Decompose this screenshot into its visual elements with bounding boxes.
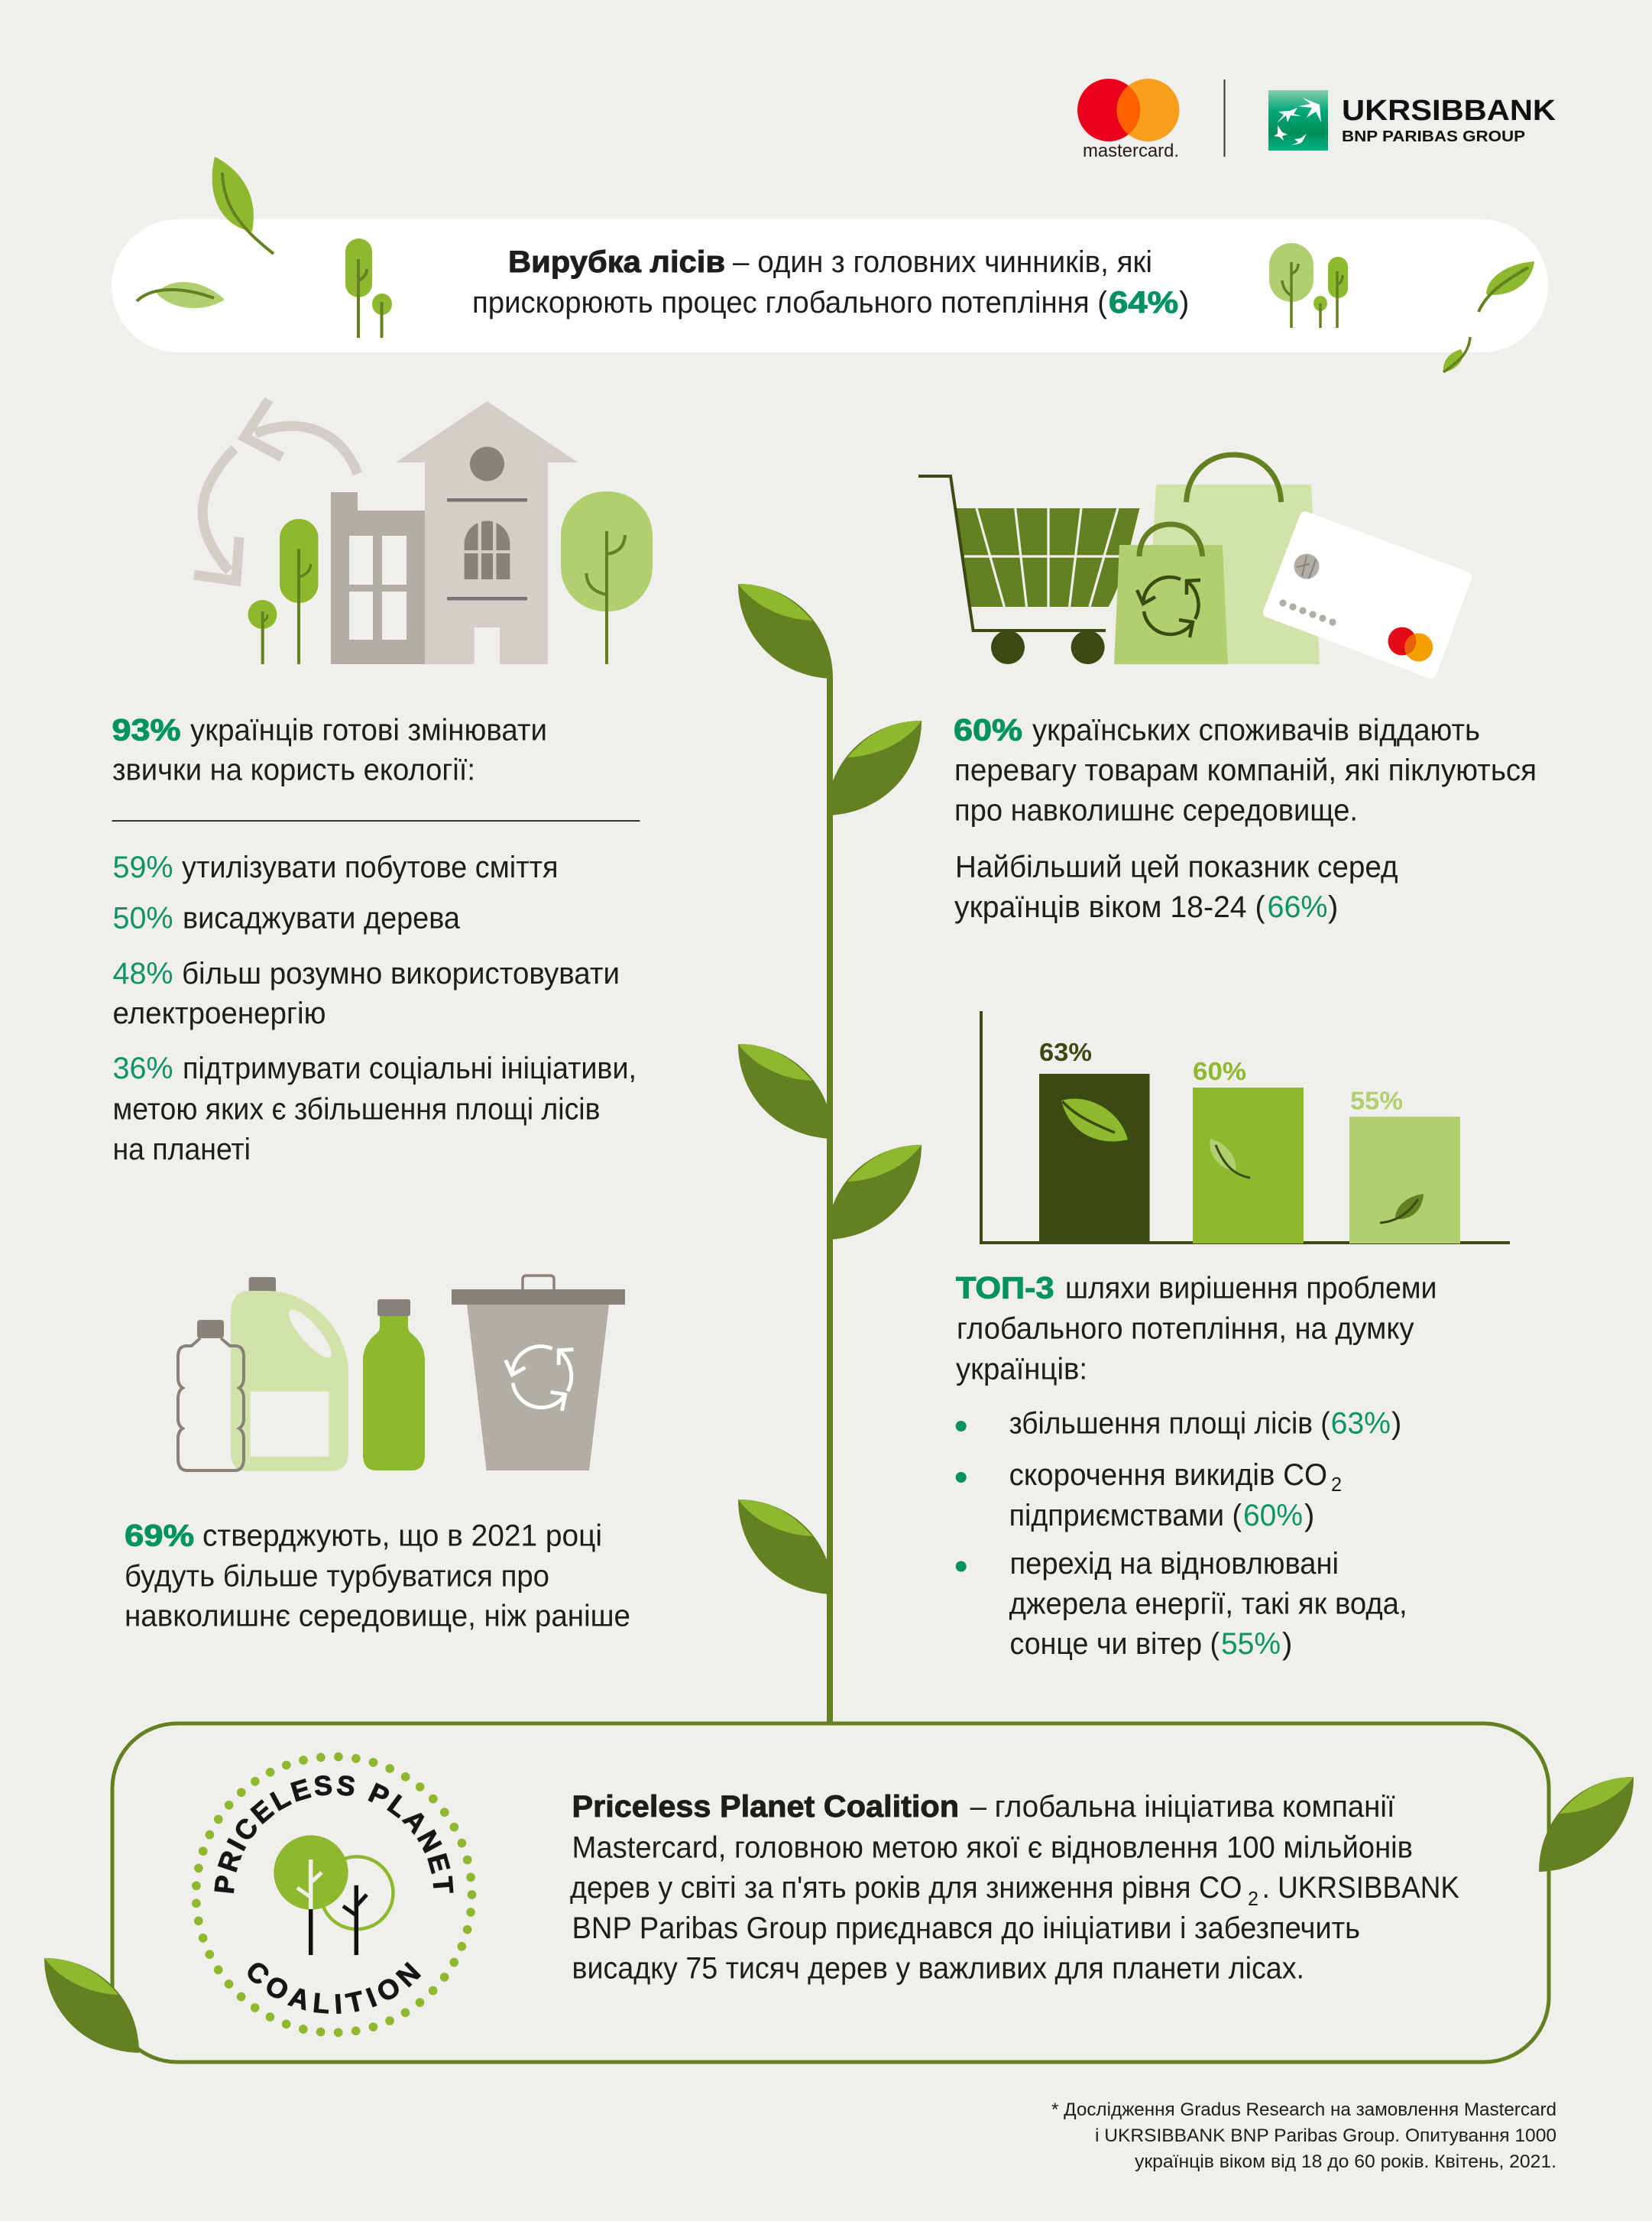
icon: trees left of headline — [345, 238, 392, 338]
list: top 3 solutions: збільшення площі лісів ( — [1009, 1406, 1330, 1440]
text block: 69%: стверджують, що в 2021 році — [202, 1519, 602, 1553]
badge: Priceless Planet Coalition: PRICELESS PLANET — [214, 1775, 454, 1894]
text block: 69% — [125, 1519, 630, 1633]
vine leaf 2 — [827, 721, 922, 815]
text block: 60% consumers: 60% — [954, 714, 1022, 747]
bar: 55% — [1349, 1087, 1460, 1243]
vine leaf 5 — [738, 1500, 833, 1594]
text block: top 3: глобального потепління, на думку — [957, 1312, 1414, 1345]
text block: 93% habits: українців готові змінювати — [190, 714, 547, 747]
illustration: shopping cart, bags and card — [918, 455, 1466, 673]
text block: 60% consumers: українців віком 18-24 ( — [954, 890, 1265, 924]
vine leaf 4 — [827, 1145, 922, 1240]
headline text: ) — [1179, 286, 1189, 319]
payment card — [1268, 517, 1466, 673]
list: habit changes: утилізувати побутове сміття — [182, 851, 558, 884]
clear bottle — [178, 1320, 244, 1470]
text block: 93% habits: 93% — [112, 714, 180, 747]
logo: ukrsibbank — [1268, 90, 1556, 151]
list: habit changes: на планеті — [113, 1133, 251, 1166]
footnote: і UKRSIBBANK BNP Paribas Group. Опитування 1000 — [1095, 2125, 1556, 2146]
headline text — [472, 245, 1189, 319]
cycle arrows — [194, 400, 358, 581]
logo: ukrsibbank: BNP PARIBAS GROUP — [1342, 128, 1525, 145]
leaf: top left — [212, 157, 274, 254]
logo: mastercard — [1077, 79, 1180, 161]
headline text: 64% — [1109, 286, 1178, 319]
text block: top 3 — [956, 1272, 1437, 1386]
list: top 3 solutions: ) — [1282, 1627, 1292, 1661]
headline pill — [112, 219, 1548, 352]
list: habit changes — [113, 851, 637, 1166]
panel: Priceless Planet Coalition — [110, 1721, 1551, 2064]
logo: mastercard: mastercard. — [1083, 141, 1179, 161]
list: habit changes: 36% — [113, 1052, 173, 1085]
vine leaf 1 — [738, 584, 833, 679]
headline text: Вирубка лісів — [508, 245, 725, 279]
illustration: house, trees and cycle arrows — [194, 400, 653, 664]
text block: 69%: 69% — [125, 1519, 194, 1553]
text block: 60% consumers: Найбільший цей показник серед — [955, 850, 1398, 884]
leaf: small right — [1443, 337, 1470, 372]
text block: top 3: ТОП-3 — [956, 1272, 1054, 1305]
vine: stem and leaves — [738, 584, 922, 1723]
list: top 3 solutions: ) — [1391, 1406, 1401, 1440]
list: top 3 solutions: ) — [1304, 1499, 1314, 1532]
bar: 55%: 55% — [1350, 1087, 1403, 1114]
leaf: inside pill left — [137, 282, 225, 308]
list: top 3 solutions: 60% — [1243, 1499, 1303, 1532]
text block: 60% consumers: перевагу товарам компаній, які піклуються — [954, 754, 1537, 787]
recycling bin — [452, 1276, 625, 1470]
bar: 60% — [1193, 1057, 1304, 1243]
panel text: висадку 75 тисяч дерев у важливих для планети лісах. — [572, 1952, 1304, 1986]
text block: 69%: будуть більше турбуватися про — [125, 1559, 549, 1593]
text block: 93% habits: звички на користь екології: — [112, 754, 475, 787]
list: top 3 solutions: перехід на відновлювані — [1010, 1547, 1339, 1581]
text block: 60% consumers: ) — [1328, 890, 1338, 924]
list: habit changes: метою яких є збільшення площі лісів — [113, 1093, 601, 1127]
list: top 3 solutions: 63% — [1331, 1406, 1391, 1440]
text block: 93% habits — [112, 714, 547, 787]
text block: 60% consumers: 66% — [1267, 890, 1328, 924]
footnote: українців віком від 18 до 60 років. Квітень, 2021. — [1135, 2151, 1556, 2172]
small bag with recycle symbol — [1114, 524, 1228, 664]
panel text: 2 — [1248, 1887, 1258, 1910]
text block: top 3: шляхи вирішення проблеми — [1065, 1272, 1437, 1305]
list: habit changes: 48% — [113, 957, 173, 991]
text block: top 3: українців: — [956, 1353, 1087, 1386]
text block: 60% consumers — [954, 714, 1537, 924]
trees near house — [248, 491, 653, 664]
list: top 3 solutions: підприємствами ( — [1009, 1499, 1242, 1532]
list: top 3 solutions: скорочення викидів CO — [1009, 1458, 1327, 1492]
green bottle — [363, 1299, 425, 1470]
list: top 3 solutions: джерела енергії, такі як вода, — [1009, 1587, 1407, 1620]
headline text: прискорюють процес глобального потепління ( — [472, 286, 1108, 319]
list: habit changes: 50% — [113, 902, 173, 935]
bar: 63%: 63% — [1039, 1038, 1092, 1066]
bar: 63% — [1039, 1038, 1149, 1243]
icon: trees right of headline — [1269, 243, 1348, 328]
bar: 60%: 60% — [1193, 1057, 1246, 1085]
panel text — [570, 1790, 1459, 1986]
panel text: Mastercard, головною метою якої є відновлення 100 мільйонів — [572, 1831, 1413, 1865]
leaf: top right — [1479, 261, 1534, 312]
list: habit changes: висаджувати дерева — [183, 902, 461, 935]
list: top 3 solutions — [956, 1406, 1407, 1661]
large bag — [1146, 455, 1320, 664]
list: top 3 solutions: сонце чи вітер ( — [1010, 1627, 1220, 1661]
text block: 60% consumers: про навколишнє середовище. — [954, 793, 1358, 827]
shopping cart — [918, 476, 1139, 664]
badge: Priceless Planet Coalition — [192, 1752, 477, 2038]
panel text: дерев у світі за п'ять років для зниження рівня CO — [570, 1871, 1242, 1905]
list: habit changes: підтримувати соціальні ініціативи, — [183, 1052, 637, 1085]
footnote — [1051, 2099, 1556, 2172]
list: habit changes: 59% — [113, 851, 173, 884]
vine leaf 3 — [738, 1044, 833, 1139]
leaf: panel right — [1539, 1777, 1634, 1872]
list: habit changes: більш розумно використовувати — [182, 957, 620, 991]
headline text: – один з головних чинників, які — [733, 245, 1152, 279]
tower building — [396, 401, 578, 664]
list: top 3 solutions: 2 — [1331, 1473, 1342, 1496]
footnote: * Дослідження Gradus Research на замовлення Mastercard — [1051, 2099, 1556, 2120]
panel text: – глобальна ініціатива компанії — [970, 1790, 1395, 1824]
leaf: panel bottom left — [44, 1958, 139, 2053]
list: habit changes: електроенергію — [113, 997, 326, 1030]
text block: 69%: навколишнє середовище, ніж раніше — [125, 1599, 630, 1633]
badge: Priceless Planet Coalition: COALITION — [248, 1961, 422, 2014]
text block: 60% consumers: українських споживачів віддають — [1032, 714, 1480, 747]
panel text: Priceless Planet Coalition — [572, 1790, 959, 1824]
bar chart: top 3 solutions — [980, 1011, 1510, 1244]
illustration: bottles and recycling bin — [178, 1276, 625, 1471]
jug — [231, 1277, 348, 1471]
panel text: . UKRSIBBANK — [1262, 1871, 1459, 1905]
list: top 3 solutions: 55% — [1221, 1627, 1281, 1661]
logo: ukrsibbank: UKRSIBBANK — [1342, 95, 1556, 127]
panel text: BNP Paribas Group приєднався до ініціативи і забезпечить — [572, 1911, 1360, 1945]
left building — [331, 492, 425, 664]
